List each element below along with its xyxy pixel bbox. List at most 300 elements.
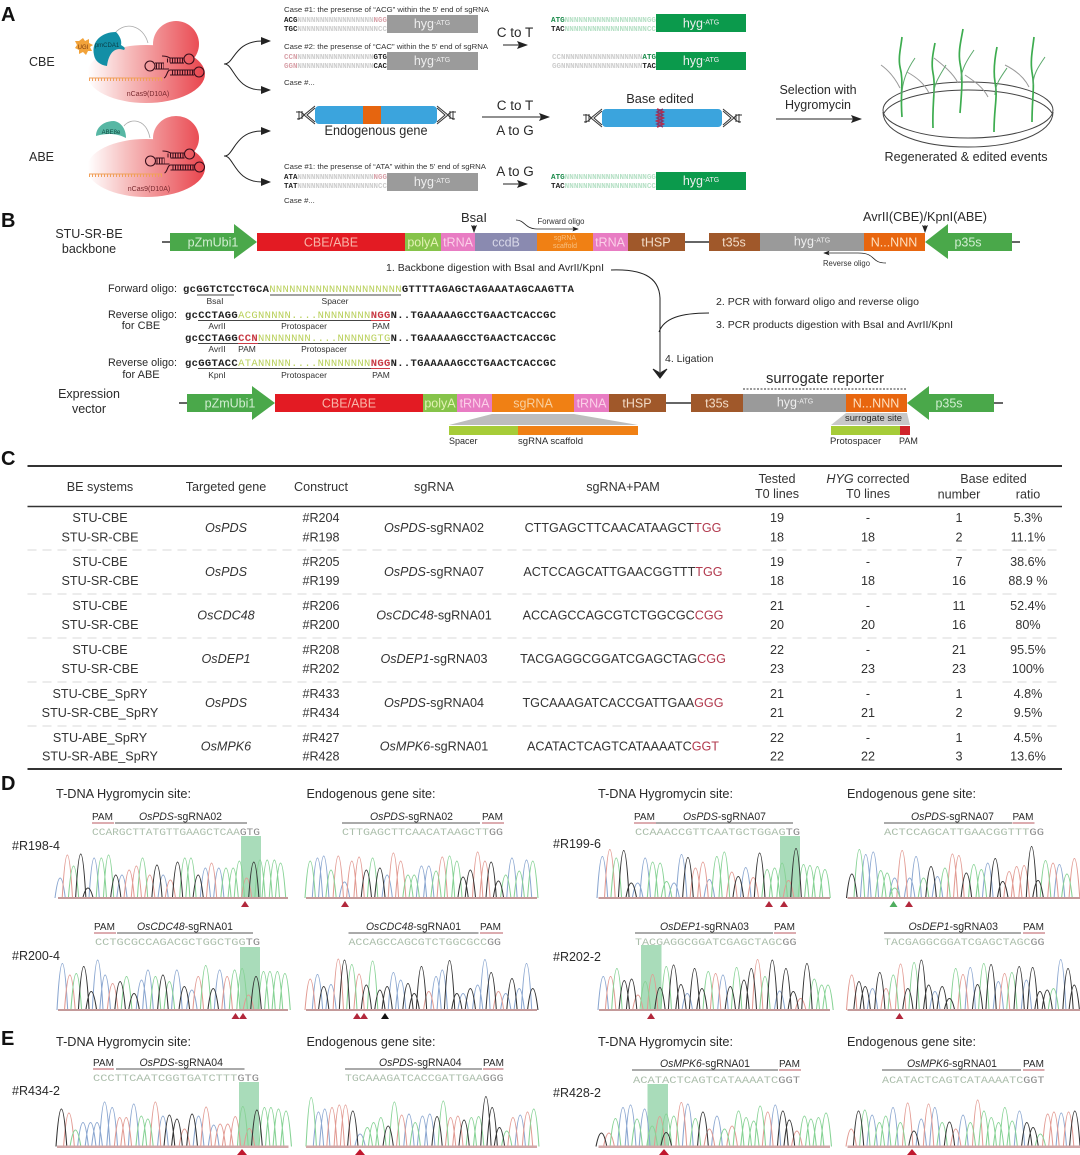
table row group 2: STU-CBE: [72, 555, 128, 569]
diagram: STU-SR-BE backbone: ccdB: [492, 236, 520, 250]
label: selection with hygromycin: Hygromycin: [785, 98, 851, 112]
table row group 2: 19: [770, 555, 784, 569]
panel C: results table: [1, 448, 1062, 769]
block: green hyg 3: -ATG: [703, 177, 719, 184]
table row group 1: #R198: [302, 530, 340, 544]
table row group 3: ACCAGCCAGCGTCTGGCGCCGG: [523, 608, 723, 622]
table row group 2: 38.6%: [1010, 555, 1046, 569]
table header: BE systems: [67, 480, 133, 494]
diagram: expression vector: hyg: [777, 396, 797, 410]
diagram: expression vector: tRNA: [577, 396, 607, 410]
label: AvrII KpnI site: [863, 209, 987, 232]
label: expression vector: [58, 387, 120, 416]
oligo: reverse for CBE PAM right: [108, 309, 557, 332]
table header: HYG corrected: [826, 472, 910, 486]
table row group 5: TGCAAAGATCACCGATTGAAGGG: [522, 696, 724, 710]
table row group 1: 2: [955, 530, 963, 544]
chromatogram: R199-6 endogenous site: ACTCCAGCATTGAACGGTTT GG: [884, 827, 1044, 839]
block: green hyg 1: hyg: [683, 16, 703, 30]
block: hyg case 2: hyg: [414, 54, 434, 68]
icon: endogenous gene: [296, 106, 456, 124]
detail: surrogate site: PAM: [899, 436, 918, 446]
table row group 4: 23: [861, 662, 875, 676]
diagram: expression vector: [179, 386, 1003, 420]
label: backbone: STU-SR-BE: [55, 227, 123, 241]
oligo: reverse for ABE: Protospacer: [281, 370, 327, 380]
chromatogram: R199-6 endogenous site: OsPDS-sgRNA07: [911, 811, 994, 823]
arrow: gene editing: [482, 116, 549, 118]
table row group 4: #R208: [302, 643, 340, 657]
label: base edited: Base edited: [626, 91, 694, 106]
label: AvrII KpnI site: AvrII(CBE)/KpnI(ABE): [863, 209, 987, 224]
table row group 2: 16: [952, 574, 966, 588]
oligo: reverse for CBE PAM left: gcCCTAGGCCNNNNNNNNN....NNNNNGTGN..TGAAAAAGCCTGAACTCACCGC: [185, 333, 557, 345]
table row group 1: STU-CBE: [72, 511, 128, 525]
oligo: reverse for CBE PAM right: AvrII: [208, 321, 226, 331]
table row group 6: #R427: [302, 731, 340, 745]
block: hyg ABE case: -ATG: [434, 178, 450, 185]
icon: ABE nCas9 complex: nCas9(D10A): [128, 186, 170, 193]
chromatogram: R198-4 hygromycin site: CCARGCTTATGTTGAAGCTCAA GTG: [92, 827, 260, 839]
diagram: STU-SR-BE backbone: polyA: [407, 236, 439, 250]
diagram: STU-SR-BE backbone: p35s: [954, 236, 982, 250]
table row group 6: -: [866, 731, 870, 745]
chromatogram: R202-2 endogenous site: TACGAGGCGGATCGAGCTAGC GG: [884, 937, 1044, 949]
chromatogram: R200-4 hygromycin site: CCTGCGCCAGACGCTGGCTGG TG: [95, 937, 260, 949]
table row group 3: 20: [770, 618, 784, 632]
table row group 6: 13.6%: [1010, 750, 1046, 764]
chromatogram: R434-2 endogenous site: [306, 1057, 539, 1155]
diagram: STU-SR-BE backbone: t35s: [722, 236, 746, 250]
detail: surrogate site: [830, 413, 918, 447]
label: reverse oligo: Reverse oligo: [823, 259, 871, 268]
chromatogram: R202-2 hygromycin site: TACGAGGCGGATCGAGCTAGC GG: [635, 937, 796, 949]
diagram: expression vector: N...NNN: [853, 396, 899, 410]
sequence: edited case 2: GGNNNNNNNNNNNNNNNNNNTAC: [552, 63, 657, 71]
diagram: STU-SR-BE backbone: CBE/ABE: [304, 236, 358, 250]
block: hyg case 2: -ATG: [434, 57, 450, 64]
table row group 6: 1: [955, 731, 963, 745]
table row group 5: #R433: [302, 687, 340, 701]
chromatogram: R434-2 endogenous site: OsPDS-sgRNA04: [379, 1057, 462, 1069]
diagram: STU-SR-BE backbone: scaffold: [553, 243, 577, 250]
table row group 3: #R200: [302, 618, 340, 632]
sample label R428-2: #R428-2: [553, 1086, 601, 1100]
table row group 1: CTTGAGCTTCAACATAAGCTTGG: [525, 521, 721, 535]
arrow: C to T upper: [503, 44, 527, 46]
chromatogram: R198-4 hygromycin site: PAM: [92, 812, 113, 823]
label: reverse oligo: [823, 253, 886, 268]
oligo: reverse for ABE: PAM: [372, 370, 390, 380]
sample label R434-2: #R434-2: [12, 1084, 60, 1098]
table row group 6: STU-ABE_SpRY: [53, 731, 148, 745]
sequence: case 1 unedited: TGCNNNNNNNNNNNNNNNNNNCC: [284, 26, 388, 34]
chromatogram: R428-2 hygromycin site: OsMPK6-sgRNA01: [660, 1058, 750, 1070]
oligo: reverse for ABE: for ABE: [122, 369, 160, 381]
table row group 3: 11: [952, 599, 966, 613]
table row group 3: OsCDC48-sgRNA01: [376, 608, 492, 622]
table row group 2: 18: [770, 574, 784, 588]
oligo: forward: Forward oligo:: [108, 283, 177, 295]
label: selection with hygromycin: Selection with: [779, 83, 857, 97]
chromatogram: R428-2 endogenous site: [846, 1058, 1080, 1155]
table row group 1: 5.3%: [1014, 511, 1042, 525]
table row group 1: 19: [770, 511, 784, 525]
table row group 5: OsPDS: [205, 696, 248, 710]
sequence: case 2 unedited: CCNNNNNNNNNNNNNNNNNNGTG: [284, 54, 388, 62]
icon: ABE nCas9 complex: ABE8e: [102, 130, 121, 136]
block: green hyg 2: -ATG: [703, 57, 719, 64]
sequence: edited case 2: CCNNNNNNNNNNNNNNNNNNATG: [552, 54, 657, 62]
table row group 5: 1: [955, 687, 963, 701]
table row group 5: [42, 687, 1042, 720]
diagram: STU-SR-BE backbone: tHSP: [641, 236, 671, 250]
sequence: ABE case unedited: ATANNNNNNNNNNNNNNNNNNGG: [284, 174, 388, 182]
diagram: STU-SR-BE backbone: hyg: [794, 234, 814, 248]
chromatogram: R428-2 endogenous site: ACATACTCAGTCATAAAATC GGT: [882, 1075, 1044, 1087]
detail: sgRNA breakdown: [449, 414, 638, 446]
table row group 2: -: [866, 555, 870, 569]
diagram: STU-SR-BE backbone: tRNA: [595, 236, 626, 250]
block: green hyg 3: [656, 172, 746, 190]
subheading: T-DNA left: T-DNA Hygromycin site:: [56, 1034, 191, 1049]
chromatogram: R202-2 hygromycin site: PAM: [774, 922, 795, 933]
sequence: edited ABE case: TACNNNNNNNNNNNNNNNNNNCC: [551, 183, 657, 191]
table row group 2: 7: [955, 555, 963, 569]
diagram: STU-SR-BE backbone: sgRNA: [554, 235, 576, 242]
icon: CBE nCas9 complex: UGI: [78, 45, 89, 51]
block: hyg case 1: [387, 15, 478, 33]
table row group 4: OsDEP1: [202, 652, 250, 666]
text: case 1 ACG: Case #1: the presense of “ACG” within the 5' end of sgRNA: [284, 5, 490, 14]
chromatogram: R199-6 hygromycin site: OsPDS-sgRNA07: [683, 811, 766, 823]
icon: base edited gene: [583, 109, 742, 127]
subheading: endogenous left: Endogenous gene site:: [306, 786, 436, 801]
panel E: SpRY chromatograms: [1, 1028, 1080, 1155]
table row group 4: STU-SR-CBE: [62, 662, 138, 676]
arrow: CBE branching: [224, 37, 271, 94]
chromatogram: R199-6 hygromycin site: CCAAACCGTTCAATGCTGGAG TG: [635, 827, 800, 839]
table row group 4: STU-CBE: [72, 643, 128, 657]
label: expression vector: vector: [72, 402, 106, 416]
icon: petri dish with plants: [881, 29, 1053, 147]
oligo: forward: gcGGTCTCCTGCANNNNNNNNNNNNNNNNNNNNGTTTTAGAGCTAGAAATAGCAAGTTA: [183, 284, 575, 296]
label: A to G lower: A to G: [496, 164, 534, 179]
table row group 6: OsMPK6-sgRNA01: [380, 740, 488, 754]
chromatogram: R198-4 hygromycin site: [55, 811, 288, 907]
table row group 2: #R199: [302, 574, 340, 588]
chromatogram: R202-2 endogenous site: PAM: [1023, 922, 1044, 933]
table header: sgRNA: [414, 480, 455, 494]
table row group 2: [62, 555, 1048, 588]
label: forward oligo: Forward oligo: [538, 217, 585, 226]
table row group 5: STU-CBE_SpRY: [53, 687, 148, 701]
table row group 6: STU-SR-ABE_SpRY: [42, 750, 159, 764]
label: expression vector: Expression: [58, 387, 120, 401]
chromatogram: R198-4 endogenous site: OsPDS-sgRNA02: [370, 811, 453, 823]
block: hyg ABE case: [387, 173, 478, 191]
arrow: A to G lower: [503, 183, 527, 185]
table row group 5: OsPDS-sgRNA04: [384, 696, 484, 710]
table row group 1: 18: [770, 530, 784, 544]
sequence: case 1 unedited: [284, 17, 388, 34]
table row group 3: 52.4%: [1010, 599, 1046, 613]
table row group 4: [62, 643, 1046, 676]
table row group 1: OsPDS-sgRNA02: [384, 521, 484, 535]
label: CBE: CBE: [29, 55, 55, 69]
icon: CBE nCas9 complex: [75, 21, 205, 103]
label: backbone: backbone: [62, 242, 116, 256]
chromatogram: R198-4 hygromycin site: OsPDS-sgRNA02: [139, 811, 222, 823]
detail: sgRNA breakdown: sgRNA scaffold: [518, 436, 583, 446]
chromatogram: R198-4 endogenous site: CTTGAGCTTCAACATAAGCTT GG: [342, 827, 503, 839]
diagram: expression vector: tRNA: [460, 396, 490, 410]
chromatogram: R434-2 endogenous site: PAM: [483, 1058, 504, 1069]
block: hyg ABE case: hyg: [414, 175, 434, 189]
chromatogram: R199-6 endogenous site: PAM: [1012, 812, 1033, 823]
block: hyg case 1: -ATG: [434, 20, 450, 27]
table header: ratio: [1016, 488, 1040, 502]
diagram: expression vector: -ATG: [797, 398, 813, 406]
arrow: selection: [776, 118, 861, 120]
sequence: edited case 2: [552, 54, 657, 71]
oligo: reverse for CBE PAM right: Protospacer: [281, 321, 327, 331]
label: forward oligo: [516, 217, 585, 229]
block: green hyg 1: -ATG: [703, 20, 719, 26]
oligo: forward: BsaI: [206, 296, 224, 306]
text: case 1 ATA: Case #1: the presense of “ATA” within the 5' end of sgRNA: [284, 162, 487, 171]
chromatogram: R428-2 endogenous site: PAM: [1023, 1059, 1044, 1070]
heading: B: B: [1, 210, 15, 232]
text: step 2: 2. PCR with forward oligo and reverse oligo: [716, 297, 919, 308]
table header: T0 lines: [846, 487, 890, 501]
table row group 4: 95.5%: [1010, 643, 1046, 657]
table row group 6: 22: [861, 750, 875, 764]
oligo: reverse for ABE: Reverse oligo:: [108, 357, 177, 369]
table rules: [28, 466, 1062, 769]
table header: Construct: [294, 480, 348, 494]
sample label R199-6: #R199-6: [553, 837, 601, 851]
sequence: edited ABE case: ATGNNNNNNNNNNNNNNNNNNGG: [551, 174, 657, 182]
table row group 3: STU-SR-CBE: [62, 618, 138, 632]
chromatogram: R199-6 endogenous site: [846, 811, 1080, 907]
table row group 6: 4.5%: [1014, 731, 1042, 745]
label: BsaI site: BsaI: [461, 210, 487, 225]
table row group 1: STU-SR-CBE: [62, 530, 138, 544]
table row group 2: #R205: [302, 555, 340, 569]
diagram: expression vector: CBE/ABE: [322, 396, 376, 410]
block: green hyg 2: [656, 52, 746, 70]
table header: Base edited: [960, 472, 1027, 486]
table row group 2: OsPDS: [205, 565, 248, 579]
text: step 4: 4. Ligation: [665, 353, 714, 365]
table row group 3: 80%: [1015, 618, 1041, 632]
chromatogram: R434-2 hygromycin site: OsPDS-sgRNA04: [140, 1057, 223, 1069]
table row group 6: 22: [770, 731, 784, 745]
table row group 4: 100%: [1012, 662, 1044, 676]
oligo: reverse for ABE: gcGGTACCATANNNNN....NNNNNNNNNGGN..TGAAAAAGCCTGAACTCACCGC: [185, 358, 557, 370]
sequence: ABE case unedited: [284, 174, 388, 191]
block: green hyg 1: [656, 14, 746, 32]
label: backbone: [55, 227, 123, 256]
table row group 4: -: [866, 643, 870, 657]
diagram: STU-SR-BE backbone: -ATG: [814, 238, 830, 244]
icon: ABE nCas9 complex: [87, 116, 205, 197]
subheading: endogenous right: Endogenous gene site:: [847, 786, 976, 801]
chromatogram: R198-4 endogenous site: [305, 811, 538, 907]
chromatogram: R434-2 hygromycin site: [56, 1057, 291, 1155]
table row group 3: 16: [952, 618, 966, 632]
oligo: reverse for CBE PAM left: Protospacer: [301, 344, 347, 354]
oligo: reverse for CBE PAM right: PAM: [372, 321, 390, 331]
table row group 5: #R434: [302, 706, 340, 720]
chromatogram: R428-2 hygromycin site: ACATACTCAGTCATAAAATC GGT: [633, 1075, 800, 1087]
oligo: reverse for CBE PAM left: PAM: [238, 344, 256, 354]
block: hyg case 1: hyg: [414, 17, 434, 31]
icon: CBE nCas9 complex: pmCDA1: [95, 43, 120, 49]
diagram: expression vector: pZmUbi1: [205, 396, 255, 410]
table row group 2: 18: [861, 574, 875, 588]
table header: [67, 472, 1040, 502]
chromatogram: R198-4 endogenous site: PAM: [482, 812, 503, 823]
subheading: T-DNA right: T-DNA Hygromycin site:: [598, 1034, 733, 1049]
chromatogram: R202-2 endogenous site: OsDEP1-sgRNA03: [908, 921, 998, 933]
table row group 1: 1: [955, 511, 963, 525]
block: green hyg 2: hyg: [683, 54, 703, 68]
table row group 5: 21: [770, 687, 784, 701]
oligo: reverse for CBE PAM left: AvrII: [208, 344, 226, 354]
chromatogram: R202-2 hygromycin site: [598, 921, 833, 1019]
subheading: T-DNA right: T-DNA Hygromycin site:: [598, 786, 733, 801]
sample label R198-4: #R198-4: [12, 839, 60, 853]
label: regenerated events: Regenerated & edited events: [884, 149, 1048, 164]
diagram: STU-SR-BE backbone: [162, 224, 1020, 259]
chromatogram: R434-2 hygromycin site: PAM: [93, 1058, 114, 1069]
detail: sgRNA breakdown: Spacer: [449, 436, 478, 446]
table header: T0 lines: [755, 487, 799, 501]
table row group 4: 23: [770, 662, 784, 676]
chromatogram: R200-4 endogenous site: PAM: [480, 922, 501, 933]
chromatogram: R200-4 endogenous site: [305, 921, 538, 1019]
oligo: reverse for ABE: [108, 357, 557, 381]
heading: D: D: [1, 773, 15, 795]
diagram: expression vector: t35s: [705, 396, 729, 410]
table row group 3: #R206: [302, 599, 340, 613]
text: case 2 CAC: Case #2: the presense of “CAC” within the 5' end of sgRNA: [284, 42, 489, 51]
sample label R200-4: #R200-4: [12, 949, 60, 963]
label: ABE: ABE: [29, 150, 54, 164]
oligo: reverse for CBE PAM right: for CBE: [122, 320, 160, 332]
label: A to G middle: A to G: [496, 123, 534, 138]
sequence: case 2 unedited: GGNNNNNNNNNNNNNNNNNNCAC: [284, 63, 388, 71]
table row group 5: 9.5%: [1014, 706, 1042, 720]
table row group 6: 3: [955, 750, 963, 764]
table row group 2: STU-SR-CBE: [62, 574, 138, 588]
table row group 6: #R428: [302, 750, 340, 764]
table row group 2: ACTCCAGCATTGAACGGTTTTGG: [523, 565, 723, 579]
text: step 1: 1. Backbone digestion with BsaI and AvrII/KpnI: [386, 263, 604, 274]
table row group 6: [42, 731, 1046, 764]
table row group 1: #R204: [302, 511, 340, 525]
label: surrogate reporter: surrogate reporter: [766, 371, 884, 387]
label: C to T upper: C to T: [497, 25, 533, 40]
chromatogram: R199-6 hygromycin site: PAM: [634, 812, 655, 823]
chromatogram: R428-2 hygromycin site: [596, 1058, 831, 1155]
table row group 5: 4.8%: [1014, 687, 1042, 701]
panel A: base editor schematic: [1, 4, 1053, 205]
table row group 1: 11.1%: [1011, 530, 1045, 544]
table row group 6: OsMPK6: [201, 740, 251, 754]
label: C to T middle: C to T: [497, 98, 533, 113]
block: hyg case 2: [387, 52, 478, 70]
table header: Targeted gene: [186, 480, 266, 494]
diagram: STU-SR-BE backbone: tRNA: [443, 236, 474, 250]
table row group 4: 21: [952, 643, 966, 657]
chromatogram: R200-4 endogenous site: ACCAGCCAGCGTCTGGCGCC GG: [348, 937, 501, 949]
chromatogram: R200-4 hygromycin site: PAM: [94, 922, 115, 933]
diagram: expression vector: tHSP: [622, 396, 652, 410]
chromatogram: R200-4 hygromycin site: OsCDC48-sgRNA01: [137, 921, 233, 933]
sequence: edited case 1: ATGNNNNNNNNNNNNNNNNNNGG: [551, 17, 657, 25]
panel D: chromatograms: [1, 773, 1080, 1019]
chromatogram: R199-6 hygromycin site: [597, 811, 830, 907]
label: endogenous gene: Endogenous gene: [324, 123, 428, 138]
table row group 1: -: [866, 511, 870, 525]
sequence: edited case 1: TACNNNNNNNNNNNNNNNNNNCC: [551, 26, 657, 34]
detail: surrogate site: Protospacer: [830, 436, 881, 447]
chromatogram: R428-2 hygromycin site: PAM: [779, 1059, 800, 1070]
oligo: reverse for ABE: KpnI: [208, 370, 226, 380]
table row group 5: 21: [770, 706, 784, 720]
table row group 2: 88.9 %: [1008, 574, 1048, 588]
table row group 3: 21: [770, 599, 784, 613]
oligo: reverse for CBE PAM right: Reverse oligo:: [108, 309, 177, 321]
table row group 5: 21: [861, 706, 875, 720]
table row group 5: 2: [955, 706, 963, 720]
table row group 5: -: [866, 687, 870, 701]
chromatogram: R428-2 endogenous site: OsMPK6-sgRNA01: [907, 1058, 997, 1070]
chromatogram: R434-2 endogenous site: TGCAAAGATCACCGATTGAA GGG: [345, 1073, 503, 1085]
table row group 3: -: [866, 599, 870, 613]
table row group 2: OsPDS-sgRNA07: [384, 565, 484, 579]
chromatogram: R434-2 hygromycin site: CCCTTCAATCGGTGATCTTT GTG: [93, 1073, 259, 1085]
table row group 4: TACGAGGCGGATCGAGCTAGCGG: [520, 652, 726, 666]
sequence: edited ABE case: [551, 174, 657, 191]
oligo: reverse for CBE PAM left: [185, 333, 557, 354]
diagram: expression vector: p35s: [935, 396, 963, 410]
diagram: expression vector: sgRNA: [513, 396, 553, 410]
sequence: ABE case unedited: TATNNNNNNNNNNNNNNNNNNCC: [284, 183, 388, 191]
text: more ABE cases: Case #...: [284, 196, 315, 205]
table row group 6: 22: [770, 750, 784, 764]
chromatogram: R202-2 hygromycin site: OsDEP1-sgRNA03: [660, 921, 749, 933]
table row group 5: STU-SR-CBE_SpRY: [42, 706, 159, 720]
oligo: forward: [108, 283, 575, 306]
heading: E: E: [1, 1028, 14, 1050]
text: more cases: Case #...: [284, 78, 315, 87]
table row group 3: 20: [861, 618, 875, 632]
arrow: main flow with ligation: [611, 270, 709, 378]
table row group 4: #R202: [302, 662, 340, 676]
oligo: forward: Spacer: [322, 296, 349, 306]
arrow: ABE branching: [224, 127, 271, 186]
diagram: expression vector: polyA: [424, 396, 456, 410]
chromatogram: R202-2 endogenous site: [846, 921, 1080, 1019]
table header: Tested: [758, 472, 796, 486]
sequence: edited case 1: [551, 17, 657, 34]
table row group 3: [62, 599, 1046, 632]
table row group 4: 22: [770, 643, 784, 657]
